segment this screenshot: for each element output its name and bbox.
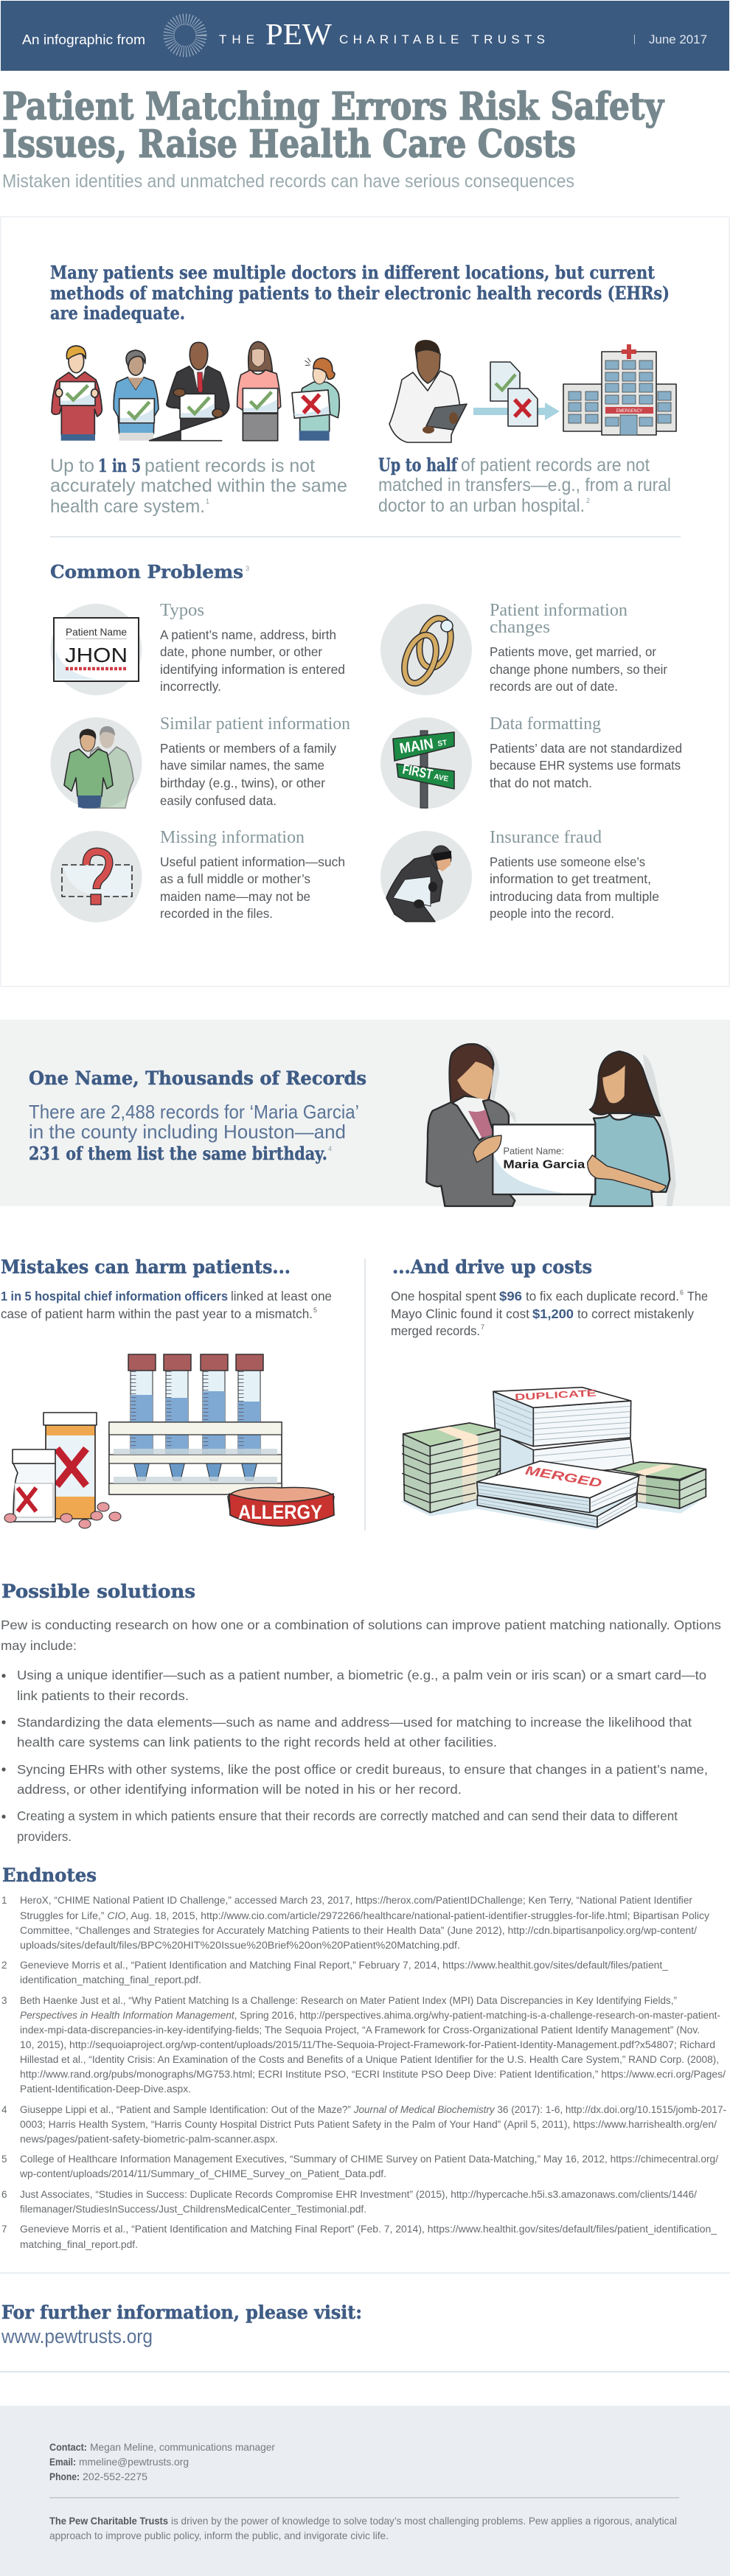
endnote 2: Genevieve Morris et al., “Patient Identification and Matching Final Report,” February 7, 2014, https://www.healthit.gov/sites/default/files/patient_ — [20, 1960, 668, 1971]
solution: syncing EHRs — [1, 1762, 708, 1797]
stat: up to half of records: Up to half — [378, 454, 458, 476]
about Pew: approach to improve public policy, inform the public, and invigorate civic life. — [49, 2530, 389, 2541]
costs text: 6 — [680, 1289, 684, 1296]
illustration: small pill bottle — [13, 1449, 55, 1522]
endnote 3: 3 — [1, 1995, 7, 2006]
illustration: hospital — [563, 344, 676, 435]
person: blue sweater — [114, 350, 159, 441]
contact details: Megan Meline, communications manager — [90, 2441, 275, 2453]
problem: typos: identifying information is entered — [160, 662, 345, 677]
endnote 3: Beth Haenke Just et al., “Why Patient Matching Is a Challenge: Research on Mater Patient Index (MPI) Data Discrepancies in Key Identifying Fields,” — [20, 1995, 677, 2006]
name sign — [493, 1124, 595, 1194]
name sign: Maria Garcia — [503, 1158, 585, 1171]
costs text: to correct mistakenly — [577, 1306, 694, 1321]
icon: name card JHON: Patient Name — [66, 626, 127, 638]
stat: 1 in 5 records: Up to — [50, 456, 94, 476]
band statement: 231 of them list the same birthday. — [29, 1143, 327, 1164]
solution: unique identifier: Using a unique identifier—such as a patient number, a biometric (e.g., a palm vein or iris scan) or a smart card—to — [17, 1668, 706, 1682]
illustration: two women holding name sign — [426, 1044, 676, 1206]
endnote 4: news/pages/patient-safety-biometric-palm-scanner.aspx. — [20, 2134, 278, 2145]
solution: standardizing data: health care systems can link patients to the right records held at other facilities. — [17, 1735, 497, 1750]
header bar: THE — [219, 32, 254, 46]
icon: name card JHON — [54, 618, 139, 681]
problem: similar patient information — [50, 714, 350, 809]
endnote 1: 1 — [1, 1895, 7, 1906]
endnote 5 — [1, 2154, 718, 2179]
about Pew: is driven by the power of knowledge to solve today’s most challenging problems. Pew applies a rigorous, analytical — [171, 2515, 677, 2527]
costs text: The — [687, 1289, 708, 1303]
duplicate record stack: DUPLICATE — [515, 1388, 597, 1402]
endnote 4: 0003; Harris Health System, “Harris County Hospital District Puts Patient Safety in the Palm of Your Hand” (April 5, 2011), https://www.harrishealth.org/en/ — [20, 2119, 717, 2130]
footer panel — [0, 2406, 730, 2576]
icon: street signs: MAIN — [398, 736, 434, 757]
harm text: 1 in 5 hospital chief information officers — [1, 1289, 228, 1303]
costs text: merged records. — [391, 1323, 480, 1338]
endnote 5: College of Healthcare Information Management Executives, “Summary of CHIME Survey on Patient Data-Matching,” May 16, 2012, https://chimecentral.org/ — [20, 2154, 718, 2165]
money stack right — [612, 1462, 706, 1508]
problem: insurance fraud: Patients use someone else’s — [490, 854, 645, 869]
header bar: PEW — [265, 17, 332, 51]
stat: 1 in 5 records: 1 in 5 — [98, 455, 141, 476]
icon: matched record document — [490, 362, 520, 401]
person: teal shirt, red X sign — [292, 358, 339, 441]
endnote 1: HeroX, “CHIME National Patient ID Challenge,” accessed March 23, 2017, https://herox.com/PatientIDChallenge; Ken Terry, “National Patient Identifier — [20, 1895, 693, 1906]
problem: missing information: Missing information — [160, 828, 305, 847]
endnote 1 — [1, 1895, 709, 1951]
problem: data formatting: Patients’ data are not standardized — [490, 741, 682, 756]
band statement — [29, 1101, 359, 1164]
header bar — [1, 1, 729, 71]
heading: common problems: 3 — [246, 565, 249, 572]
section: endnotes: Endnotes — [2, 1865, 97, 1886]
solution: syncing EHRs: Syncing EHRs with other systems, like the post office or credit bureaus, to ensure that changes in a patient’s name, — [17, 1762, 708, 1777]
panel heading: Many patients see multiple doctors in different locations, but current — [50, 262, 655, 283]
solutions intro: Pew is conducting research on how one or a combination of solutions can improve patient matching nationally. Options — [1, 1618, 721, 1632]
heading: common problems: Common Problems — [50, 561, 243, 582]
section: endnotes — [1, 1865, 726, 2250]
contact details: 202-552-2275 — [83, 2471, 147, 2482]
solution: unique identifier — [1, 1668, 706, 1703]
endnote 6: filemanager/StudiesInSuccess/Just_ChildrensMedicalCenter_Testimonial.pdf. — [20, 2204, 366, 2215]
endnote 5: 5 — [1, 2154, 7, 2165]
problem: insurance fraud — [380, 828, 659, 922]
solutions intro — [1, 1618, 721, 1653]
pills — [4, 1503, 121, 1528]
solution: patient-driven system: Creating a system in which patients ensure that their records are correctly matched and can send their data to different — [17, 1809, 678, 1823]
column: drive up costs: ...And drive up costs — [392, 1256, 592, 1278]
icon: question mark in dashed box — [62, 852, 132, 905]
contact details — [49, 2441, 275, 2482]
contact details: Contact: — [49, 2441, 87, 2453]
stat: up to half of records: 2 — [586, 497, 590, 504]
person: black suit — [150, 342, 229, 441]
endnote 6 — [1, 2189, 697, 2215]
endnote 1: uploads/sites/default/files/BPC%20HIT%20Issue%20Brief%20on%20Patient%20Matching.pdf. — [20, 1940, 460, 1951]
stat: 1 in 5 records: patient records is not — [145, 456, 315, 476]
problem: typos: incorrectly. — [160, 679, 221, 694]
contact details: mmeline@pewtrusts.org — [79, 2456, 189, 2468]
band statement: 4 — [328, 1145, 332, 1152]
stat: up to half of records: of patient records are not — [461, 455, 650, 476]
test tube 4 — [236, 1354, 263, 1480]
costs text — [391, 1289, 708, 1338]
duplicate record stack — [493, 1388, 634, 1475]
illustration: allergy wristband: ALLERGY — [238, 1501, 322, 1523]
problem: patient information changes: changes — [490, 618, 550, 637]
title: Issues, Raise Health Care Costs — [2, 122, 576, 167]
solutions intro: may include: — [1, 1638, 77, 1653]
contact details: Phone: — [49, 2471, 80, 2482]
header bar: June 2017 — [649, 32, 707, 46]
solution: syncing EHRs: address, or other identifying information will be noted in his or her record. — [17, 1782, 462, 1797]
problem: missing information — [50, 828, 345, 922]
stat: up to half of records: matched in transfers—e.g., from a rural — [378, 475, 671, 495]
further information: For further information, please visit: — [1, 2302, 362, 2323]
person: red shirt — [52, 346, 102, 441]
woman right — [590, 1051, 670, 1206]
problem: missing information: maiden name—may not be — [160, 889, 310, 904]
problem: typos — [50, 601, 345, 695]
costs text: 7 — [481, 1323, 484, 1331]
further information: www.pewtrusts.org — [1, 2325, 153, 2347]
problem: patient information changes: Patient information — [490, 601, 628, 620]
money stack left — [402, 1423, 500, 1513]
test tube 3 — [201, 1354, 228, 1480]
problem: missing information: as a full middle or mother’s — [160, 871, 310, 886]
solution: standardizing data: Standardizing the data elements—such as name and address—used for matching to increase the likelihood that — [17, 1715, 692, 1730]
person: pink sweater — [237, 341, 281, 441]
header bar: CHARITABLE TRUSTS — [339, 32, 545, 46]
icon: name card JHON: JHON — [65, 644, 128, 666]
problem: insurance fraud: introducing data from multiple — [490, 889, 659, 904]
costs text: One hospital spent — [391, 1289, 496, 1303]
stat: up to half of records: doctor to an urban hospital. — [378, 495, 585, 516]
illustration: allergy wristband — [228, 1488, 334, 1526]
problem: typos: A patient’s name, address, birth — [160, 627, 336, 642]
problem: data formatting — [380, 714, 682, 809]
endnote 3 — [1, 1995, 726, 2095]
icon: street signs — [393, 731, 454, 808]
section: possible solutions — [1, 1581, 721, 1844]
name sign: Patient Name: — [503, 1146, 564, 1157]
solution: patient-driven system — [1, 1809, 678, 1844]
contact details: Email: — [49, 2456, 76, 2468]
problem: similar patient information: easily confused data. — [160, 793, 277, 808]
title — [2, 85, 664, 167]
problem: typos: date, phone number, or other — [160, 644, 322, 659]
costs text: Mayo Clinic found it cost — [391, 1306, 529, 1321]
problem: patient information changes — [380, 601, 667, 695]
icon: masked thief with record — [386, 846, 451, 922]
endnote 7: matching_final_report.pdf. — [20, 2239, 138, 2250]
test tube 1 — [128, 1354, 156, 1480]
icon: two similar men — [64, 726, 133, 808]
problem: similar patient information: have similar names, the same — [160, 758, 324, 773]
illustration: five patients holding signs — [52, 341, 339, 441]
hands — [473, 1135, 666, 1192]
icon: unmatched record document — [508, 389, 538, 426]
panel heading — [50, 262, 670, 324]
problem: typos: Typos — [160, 601, 204, 620]
endnote 2: identification_matching_final_report.pdf. — [20, 1974, 201, 1985]
endnote 3: Patient-Identification-Deep-Dive.aspx. — [20, 2084, 191, 2095]
illustration: large pill bottle — [44, 1413, 97, 1519]
endnote 5: wp-content/uploads/2014/11/Summary_of_CHIME_Survey_on_Patient_Data.pdf. — [19, 2168, 386, 2179]
endnote 1: Committee, “Challenges and Strategies for Accurately Matching Patients to their Health Data” (June 2012), http://cdn.bipartisanpolicy.org/wp-content/ — [20, 1925, 697, 1936]
harm text: case of patient harm within the past year to a mismatch. — [1, 1306, 313, 1321]
subtitle: Mistaken identities and unmatched records can have serious consequences — [2, 171, 574, 192]
column: mistakes can harm patients — [1, 1256, 334, 1528]
endnote 6: Just Associates, “Studies in Success: Duplicate Records Compromise EHR Investment” (2015), http://hypercache.h5i.s3.amazonaws.com/clients/1446/ — [20, 2189, 697, 2200]
endnote 3: Perspectives in Health Information Management, Spring 2016, http://perspectives.ahima.org/why-patient-matching-is-a-challenge-research-on-master-patient- — [20, 2010, 720, 2021]
endnote 3: index-mpi-data-discrepancies-in-key-identifying-fields; The Sequoia Project, “A Framework for Cross-Organizational Patient Identify Management” (Nov. — [20, 2025, 700, 2036]
solution: patient-driven system: providers. — [17, 1829, 72, 1844]
costs text: $1,200 — [532, 1306, 574, 1321]
header bar: An infographic from — [22, 32, 145, 47]
solution: standardizing data — [1, 1715, 692, 1750]
endnote 1: Struggles for Life,” CIO, Aug. 18, 2015, http://www.cio.com/article/2972266/healthcare/national-patient-identifier-struggles-for-life.html; Bipartisan Policy — [20, 1910, 709, 1921]
problem: insurance fraud: information to get treatment, — [490, 871, 651, 886]
endnote 4: 4 — [1, 2104, 7, 2115]
stat: 1 in 5 records: 1 — [206, 498, 209, 505]
panel: one name, thousands of records — [0, 1020, 730, 1206]
problem: data formatting: that do not match. — [490, 776, 592, 790]
endnote 2 — [1, 1960, 668, 1985]
icon: street signs: ST — [437, 739, 448, 748]
problem: data formatting: Data formatting — [490, 714, 601, 734]
harm text: 5 — [313, 1306, 317, 1314]
column: mistakes can harm patients: Mistakes can harm patients... — [1, 1256, 291, 1278]
illustration: money and paper stacks — [400, 1388, 706, 1530]
problem: similar patient information: Similar patient information — [160, 714, 350, 734]
endnote 2: 2 — [1, 1960, 7, 1971]
band statement: in the county including Houston—and — [29, 1121, 346, 1143]
stat: 1 in 5 records: health care system. — [50, 496, 205, 517]
problem: patient information changes: change phone numbers, so their — [490, 662, 667, 677]
endnote 7 — [1, 2224, 717, 2250]
about Pew: The Pew Charitable Trusts — [49, 2515, 168, 2527]
stat: 1 in 5 records: accurately matched within the same — [50, 476, 347, 496]
problem: insurance fraud: Insurance fraud — [490, 828, 602, 847]
problem: missing information: recorded in the files. — [160, 906, 273, 921]
about Pew — [49, 2515, 677, 2541]
stat: up to half of records — [378, 454, 671, 516]
merged record stack: MERGED — [524, 1463, 603, 1491]
stat: 1 in 5 records — [50, 455, 347, 517]
problem: data formatting: because EHR systems use formats — [490, 758, 681, 773]
band heading: One Name, Thousands of Records — [29, 1068, 366, 1089]
solution: unique identifier: link patients to their records. — [17, 1688, 189, 1703]
endnote 3: 10, 2015), http://sequoiaproject.org/wp-content/uploads/2015/11/The-Sequoia-Project-Framework-for-Patient-Identity-Management.pdf?x54807; Richard — [20, 2039, 715, 2050]
problem: insurance fraud: people into the record. — [490, 906, 614, 921]
merged record stack — [477, 1461, 639, 1528]
harm text — [1, 1289, 332, 1321]
endnote 6: 6 — [1, 2189, 7, 2200]
harm text: linked at least one — [231, 1289, 332, 1303]
column: drive up costs — [391, 1256, 708, 1530]
costs text: to fix each duplicate record. — [526, 1289, 679, 1303]
woman left — [426, 1044, 515, 1206]
section: possible solutions: Possible solutions — [1, 1581, 195, 1602]
problem: similar patient information: Patients or members of a family — [160, 741, 336, 756]
problem: similar patient information: birthday (e.g., twins), or other — [160, 776, 325, 790]
problem: patient information changes: Patients move, get married, or — [490, 644, 656, 659]
endnote 3: http://www.rand.org/pubs/monographs/MG753.html; ECRI Institute PSO, “ECRI Institute PSO Deep Dive: Patient Identification,” https://www.ecri.org/Pages/ — [20, 2069, 726, 2080]
arrow: records to hospital — [473, 403, 560, 420]
endnote 7: 7 — [1, 2224, 7, 2235]
endnote 3: Hillestad et al., “Identity Crisis: An Examination of the Costs and Benefits of a Unique Patient Identifier for the U.S. Health Care System,” RAND Corp. (2008), — [20, 2054, 719, 2065]
problem: missing information: Useful patient information—such — [160, 854, 345, 869]
band statement: There are 2,488 records for ‘Maria Garcia’ — [29, 1101, 359, 1123]
problem: patient information changes: records are out of date. — [490, 679, 618, 694]
endnote 7: Genevieve Morris et al., “Patient Identification and Matching Final Report” (Feb. 7, 2014), https://www.healthit.gov/sites/default/files/patient_identification_ — [20, 2224, 717, 2235]
icon: street signs: AVE — [433, 773, 449, 784]
test tube 2 — [164, 1354, 191, 1480]
panel: overview and common problems — [1, 217, 729, 986]
panel heading: are inadequate. — [50, 302, 185, 324]
illustration: doctor — [389, 340, 467, 442]
costs text: $96 — [499, 1289, 522, 1303]
endnote 4: Giuseppe Lippi et al., “Patient and Sample Identification: Out of the Maze?” Journal of Medical Biochemistry 36 (2017): 1-6, http://dx.doi.org/10.1515/jomb-2017- — [20, 2104, 726, 2115]
icon: wedding rings — [399, 615, 456, 687]
illustration: hospital: EMERGENCY — [616, 408, 643, 414]
endnote 4 — [1, 2104, 726, 2145]
illustration: test tubes in rack — [109, 1354, 282, 1494]
further information — [1, 2302, 362, 2347]
icon: street signs: FIRST — [401, 762, 434, 783]
icon: Pew sunburst logo — [169, 19, 201, 52]
